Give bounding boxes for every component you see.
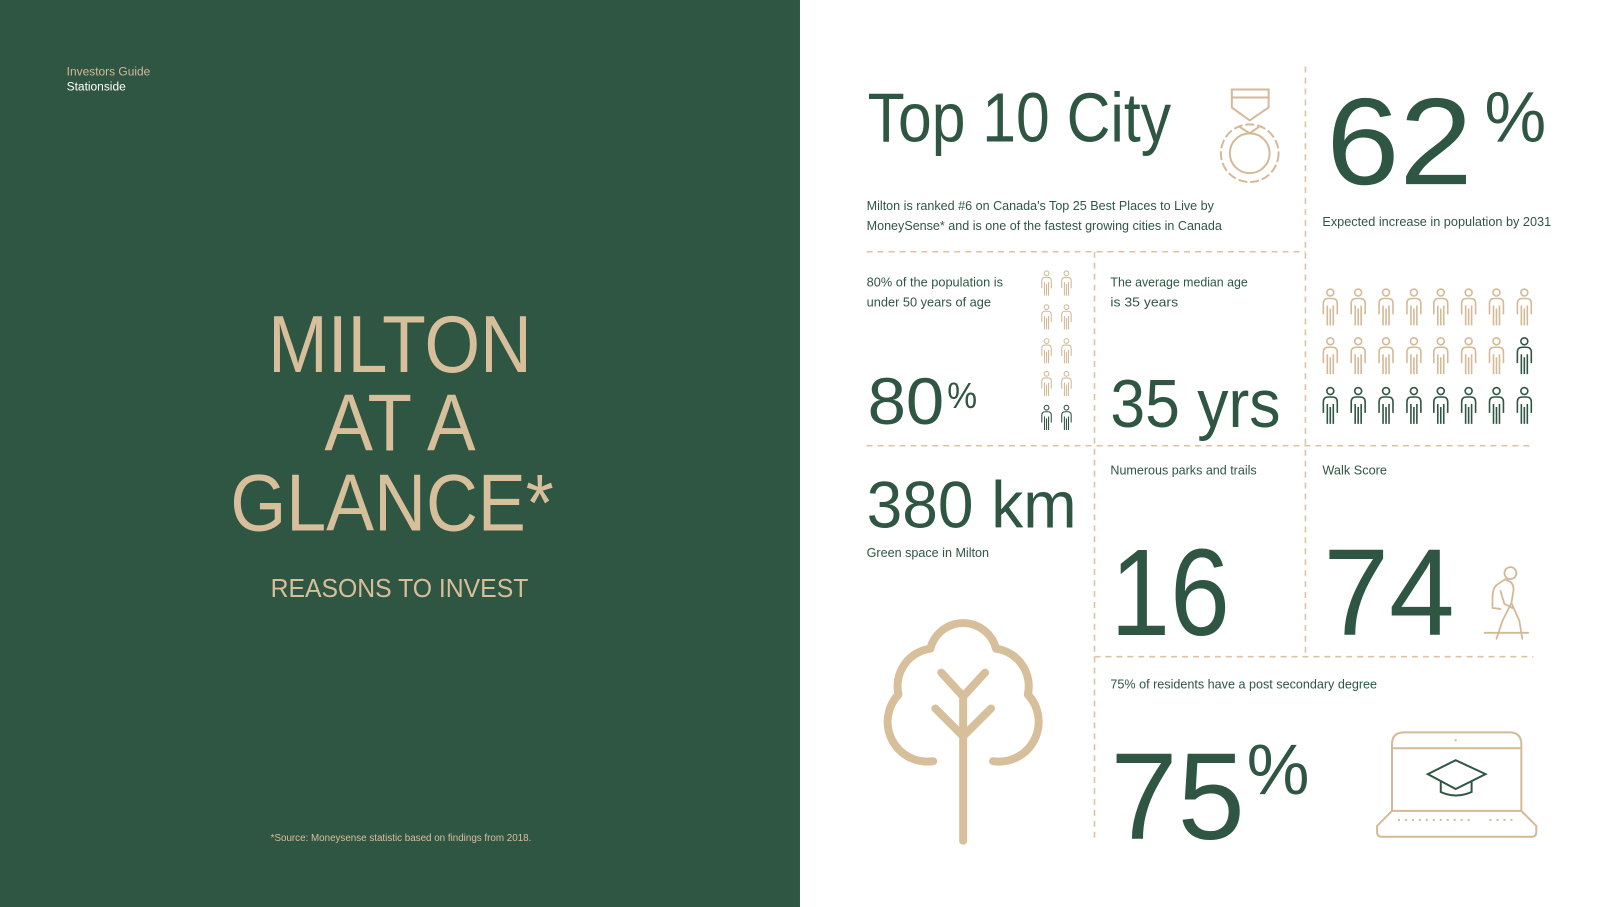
panel: 35 yrs: The average median age — [1110, 275, 1248, 290]
panel: 62%: 62 — [1326, 73, 1473, 211]
panel: parks 16: Numerous parks and trails — [1110, 463, 1257, 478]
panel: 80% — [867, 271, 1071, 438]
panel: 75%: 75 — [1110, 728, 1245, 866]
panel: 35 yrs: is 35 years — [1110, 294, 1178, 309]
title — [230, 300, 554, 548]
panel: walk score 74 — [1322, 463, 1455, 662]
panel: 35 yrs — [1110, 275, 1281, 442]
panel: 75%: % — [1247, 730, 1309, 810]
icon grid: people 24 — [1323, 289, 1531, 424]
icon: laptop with grad cap — [1377, 732, 1536, 837]
title: MILTON — [268, 300, 532, 390]
icon grid: small people — [1042, 271, 1071, 430]
panel: walk score 74: 74 — [1323, 524, 1455, 662]
panel: 75%: 75% of residents have a post secondary degree — [1110, 677, 1377, 692]
icon: medal — [1221, 90, 1279, 182]
panel: left green — [0, 0, 800, 907]
title: AT A — [324, 379, 476, 469]
icon: walker — [1485, 567, 1528, 639]
panel: 75% — [1110, 677, 1377, 866]
dividers — [867, 67, 1533, 842]
panel: top 10 city: MoneySense* and is one of the fastest growing cities in Canada — [867, 218, 1223, 233]
panel: parks 16: 16 — [1110, 524, 1230, 662]
panel: 80%: % — [947, 376, 977, 416]
panel: 62%: Expected increase in population by 2031 — [1322, 214, 1551, 229]
panel: 35 yrs: 35 yrs — [1110, 367, 1281, 442]
panel: 62%: % — [1485, 77, 1546, 157]
subtitle: REASONS TO INVEST — [271, 575, 529, 603]
panel: 80%: 80 — [868, 365, 944, 438]
title: GLANCE* — [230, 458, 554, 548]
header text: Investors Guide — [67, 65, 151, 79]
icon: tree — [888, 623, 1039, 841]
panel: 62% — [1322, 73, 1551, 229]
panel: top 10 city: Milton is ranked #6 on Canada's Top 25 Best Places to Live by — [867, 198, 1214, 213]
panel: 380 km: Green space in Milton — [867, 545, 989, 560]
panel: parks 16 — [1110, 463, 1257, 662]
panel: top 10 city: Top 10 City — [868, 78, 1171, 156]
panel: top 10 city — [867, 78, 1279, 233]
header text: Stationside — [67, 80, 126, 94]
panel: walk score 74: Walk Score — [1322, 463, 1387, 478]
footnote: *Source: Moneysense statistic based on findings from 2018. — [271, 833, 531, 844]
header text — [67, 65, 151, 94]
panel: 380 km: 380 km — [867, 468, 1077, 541]
panel: 80%: 80% of the population is — [867, 275, 1003, 290]
panel: 80%: under 50 years of age — [867, 294, 991, 309]
